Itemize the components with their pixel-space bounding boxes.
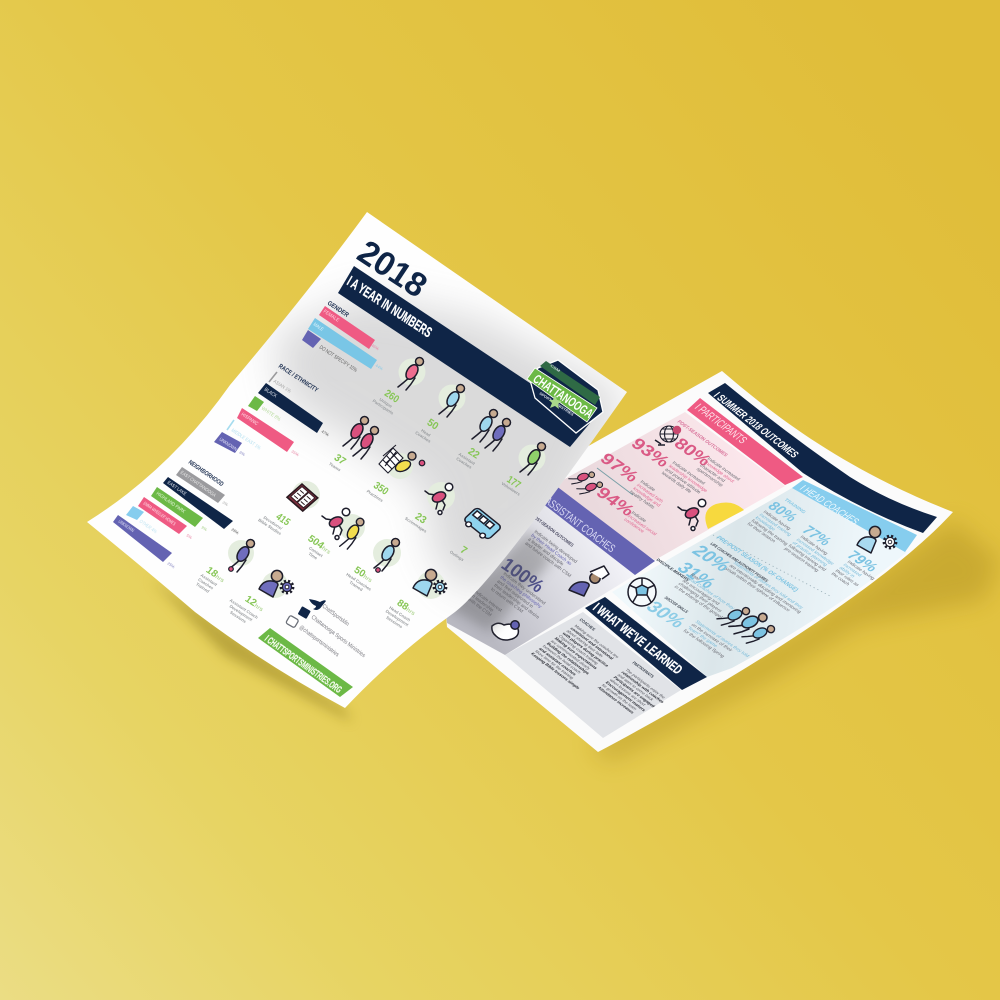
text: participants learned list: The participants enjoy the xyxy=(624,668,667,700)
chart: race bars: 8% xyxy=(238,450,247,457)
logo: chattanooga sports ministries xyxy=(527,360,603,433)
stat: 22 assistant coaches: Coaches xyxy=(455,456,473,470)
stat: 100%: 100% xyxy=(497,554,548,597)
stat: 88 hrs head coach development xyxy=(382,569,446,632)
text: 79% training note: Indicate having xyxy=(846,560,876,581)
stat: 50 head coaches: Coaches xyxy=(414,430,432,444)
shadow of left sheet on right sheet xyxy=(445,530,552,632)
text: coaches learned list: between the head coach xyxy=(542,644,583,675)
text: 31% note: Head Coaches of how they xyxy=(685,576,736,610)
text: 79% training note: ability in xyxy=(838,566,856,578)
icon: graduate xyxy=(569,566,609,596)
chart: neighborhood bars: 3% xyxy=(221,500,230,507)
text: coaches learned list: Making sure expectations xyxy=(553,637,599,670)
chart: race bars: MIDDLE EAST 1% xyxy=(230,428,262,452)
chart: race bars: 47% xyxy=(320,429,330,437)
chart: gender bars xyxy=(302,306,384,374)
text: 100% note: the coaching philosophy xyxy=(499,575,543,609)
band: what we've learned xyxy=(585,597,707,690)
text: 77% training note: increased knowledge xyxy=(795,538,836,566)
text: 80% training note: following the training xyxy=(750,519,790,546)
heading: pre-post season: PRE-POST SEASON (% OF CHANGE) xyxy=(714,535,800,593)
stat: 80% participants: 80% xyxy=(670,435,715,469)
icon: group of coaches xyxy=(715,597,776,652)
text: 79% training note: the coach xyxy=(830,572,851,586)
stat: 415 devotions: 415 xyxy=(273,511,293,528)
text: participants learned list: Attendance increases xyxy=(597,686,636,715)
stat: 260 unique participants xyxy=(372,358,426,416)
text: 77% training note: of practice planning xyxy=(791,541,829,567)
chart: neighborhood bars: EAST CHATTANOOGA xyxy=(179,470,217,499)
stat: 50 head coaches: 50 xyxy=(425,417,440,433)
chart: neighborhood bars: 9% xyxy=(200,525,209,532)
stat: 50 head coaches: Head xyxy=(420,428,432,438)
band: summer 2018 outcomes: I SUMMER 2018 OUTCOMES xyxy=(711,391,801,460)
text: 97% note: knowledge and xyxy=(632,486,662,508)
logo: chattanooga sports ministries: CSM xyxy=(549,364,561,373)
stat: 350 practices: 350 xyxy=(371,480,391,498)
stat: 177 volunteers xyxy=(500,442,546,497)
text: 77% training note: pre-season training xyxy=(783,547,820,573)
stat: 50 hrs head coaches trained: Head Coaches xyxy=(345,572,373,592)
text: coaches learned list: Making sure the coaches are xyxy=(573,624,621,659)
chart: race bars: WHITE 8% xyxy=(260,406,282,423)
chart: race bars: BLACK xyxy=(263,387,278,400)
text: 93% note: towards daily life xyxy=(660,471,693,494)
stat: 93%: 93% xyxy=(627,435,674,471)
band: a year in numbers xyxy=(338,266,590,447)
stat: 37 teams: Teams xyxy=(328,461,342,473)
text: coaches learned list: with players during practice xyxy=(561,631,611,668)
stat: 79%: 79% xyxy=(843,548,882,575)
text: participants learned list: for growth on the team xyxy=(600,683,639,711)
stat: 88 hrs head coach development: Sessions xyxy=(385,615,404,630)
stat: 7 outings: 7 xyxy=(458,545,469,557)
chart: gender bars: MALE xyxy=(312,322,325,333)
icon: piggy bank xyxy=(492,621,519,640)
chart: neighborhood bars: UNKNOWN xyxy=(117,519,136,534)
text: assistant small note: Indicate interest xyxy=(473,589,504,613)
logo: chattanooga sports ministries: SPORTS MINISTRIES xyxy=(538,392,575,417)
band: summer 2018 outcomes xyxy=(708,383,937,533)
stat: 415 devotions xyxy=(257,481,320,536)
text: 80% training note: knowledge xyxy=(754,516,777,532)
stat: 92%: 92% xyxy=(490,510,528,543)
icon: head coach with gear xyxy=(857,526,896,553)
text: 92% note: Indicate being developed xyxy=(533,529,579,564)
text: 30% note: Statements of stories they told xyxy=(694,620,751,658)
chart: race bars xyxy=(214,372,330,457)
stat: 94%: 94% xyxy=(592,484,639,520)
panel: left sheet xyxy=(87,212,627,708)
text: 93% note: and positive attitude xyxy=(664,467,702,495)
panel: right sheet xyxy=(440,371,953,752)
text: 100% note: to return with CSM xyxy=(490,586,524,614)
chart: race bars: UNKNOWN xyxy=(218,437,238,453)
chart: neighborhood bars: 26% xyxy=(230,527,240,536)
subheading: disciple-makers: DISCIPLE-MAKERS xyxy=(655,558,691,582)
text: 79% training note: their roles as xyxy=(834,569,861,587)
text: participants learned list: and want to come back xyxy=(616,673,656,702)
text: participants learned list: Encouragement matters xyxy=(604,681,648,712)
stat: 18 hrs assistant coaches trained: Assistant xyxy=(199,573,219,587)
stat: 50 hrs head coaches trained xyxy=(343,538,401,596)
text: 97% note: healthy habits xyxy=(628,490,656,510)
divider: dotted xyxy=(713,535,832,597)
logo: chattanooga sports ministries: CHATTANOOGA xyxy=(530,371,597,421)
stat: 77%: 77% xyxy=(798,523,835,549)
stat: 260 unique participants: Participants xyxy=(372,398,395,416)
text: participants learned list: Participants are engaged xyxy=(612,675,657,708)
heading: assistant post-season outcomes: POST-SEASON OUTCOMES xyxy=(531,514,574,549)
chart: race bars: ASIAN 1% xyxy=(272,379,292,395)
stat: 37 teams xyxy=(328,416,378,473)
text: 94% note: increased social xyxy=(627,514,658,536)
chart: neighborhood bars: EMMA WHEELER HOMES xyxy=(142,501,177,527)
text: assistant small note: in leadership xyxy=(470,593,495,613)
stat: 80% head coaches: 80% xyxy=(764,499,801,525)
stat: 88 hrs head coach development: Head Coach xyxy=(388,605,412,623)
stat: 22 assistant coaches xyxy=(455,410,510,470)
text: participants learned list: relationship with coaches xyxy=(620,670,666,704)
text: 80% note: sportsmanship xyxy=(695,467,724,488)
text: coaches learned list: are communicated clearly xyxy=(549,639,593,671)
shadow: left sheet xyxy=(150,578,352,722)
text: coaches learned list: about sharing their faith xyxy=(565,629,605,658)
stat: 350 practices: Practices xyxy=(366,489,385,503)
heading: post-season outcomes: POST-SEASON OUTCOMES xyxy=(675,420,729,458)
stat: 12 hrs assistant coach development: Development xyxy=(228,604,254,622)
stat: 30%: 30% xyxy=(641,598,690,632)
text: 77% training note: following training and xyxy=(787,544,828,572)
panel: assistant coaches background xyxy=(440,503,635,655)
band: a year in numbers: I A YEAR IN NUMBERS xyxy=(344,274,434,341)
stat: 350 practices xyxy=(366,445,425,503)
stat: 50 hrs head coaches trained: Trained xyxy=(348,580,364,592)
stat: 88 hrs head coach development: 88hrs xyxy=(395,598,419,618)
panel: head coaches background xyxy=(612,488,907,677)
chart: neighborhood bars xyxy=(113,467,240,570)
chart: neighborhood bars: 25% xyxy=(166,561,176,570)
stat: 177 volunteers: 177 xyxy=(504,475,522,491)
text: coaches learned list: Building the relationships xyxy=(546,642,591,676)
chart: gender bars: 44% xyxy=(374,363,384,371)
stat: 260 unique participants: Unique xyxy=(378,397,394,409)
text: 77% training note: Indicate having xyxy=(799,535,829,556)
text: coaches learned list: Organizing coach training xyxy=(557,634,600,666)
social links: ChattSportsMin xyxy=(321,604,350,628)
shadow: right sheet xyxy=(590,520,1000,762)
chart: gender bars: 46% xyxy=(370,343,380,351)
text: 94% note: confidence xyxy=(623,517,646,534)
text: 80% note: knowledge about xyxy=(703,460,736,484)
text: 92% note: by their Head Coach as xyxy=(530,533,573,567)
stat: 23 scrimmages xyxy=(404,482,455,534)
stat: 504 hrs contact time: Contact xyxy=(308,546,324,558)
text: assistant small note: with the CSM xyxy=(467,597,493,617)
banner: website: I CHATTSPORTSMINISTRIES.ORG xyxy=(262,634,344,696)
chart: gender bars: FEMALE xyxy=(322,309,341,324)
icon: participant soccer xyxy=(678,499,706,530)
stat: 415 devotions: Devotions/ xyxy=(262,515,284,531)
stat: 12 hrs assistant coach development: 12hrs xyxy=(243,594,267,614)
chart: gender bars: DO NOT SPECIFY 10% xyxy=(318,345,358,374)
stat: 504 hrs contact time: Time xyxy=(307,551,319,561)
participants yellow semicircle xyxy=(705,502,744,529)
text: 20% note: youth within their sphere of influence xyxy=(724,567,792,612)
chart: neighborhood bars: EAST LAKE xyxy=(166,480,188,497)
stat: 12 hrs assistant coach development: Assistant Coach xyxy=(229,598,259,620)
band: participants: I PARTICIPANTS xyxy=(692,402,749,446)
stat: 23 scrimmages: 23 xyxy=(413,511,428,527)
icon: soccer ball xyxy=(628,578,656,606)
stat: 415 devotions: Bible Studies xyxy=(257,517,283,536)
band: what we've learned: I WHAT WE'VE LEARNED xyxy=(590,600,686,677)
stat: 50 hrs head coaches trained: 50hrs xyxy=(352,565,376,585)
text: 31% note: are encouraging and xyxy=(681,579,721,606)
stat: 22 assistant coaches: Assistant xyxy=(458,451,477,466)
icon: two participants xyxy=(567,463,604,502)
text: 31% note: Rate xyxy=(689,573,702,581)
subheading: soccer skills: SOCCER SKILLS xyxy=(663,596,690,614)
panel: what we've learned background xyxy=(505,612,681,738)
band: assistant coaches: I ASSISTANT COACHES xyxy=(539,493,617,555)
text: participants learned list: when lessons are short xyxy=(608,678,648,707)
social links xyxy=(286,599,366,659)
stat: 37 teams: 37 xyxy=(332,452,348,467)
text: coaches learned list: and assistant coaches xyxy=(538,647,578,677)
stat: 18 hrs assistant coaches trained xyxy=(193,540,254,595)
stat: 97%: 97% xyxy=(596,450,643,486)
stat: 12 hrs assistant coach development: Sessions xyxy=(229,610,248,624)
text: 80% note: character and xyxy=(699,463,727,483)
stat: 18 hrs assistant coaches trained: 18hrs xyxy=(204,565,228,585)
text: 80% training note: for their season xyxy=(746,522,777,543)
chart: neighborhood bars: OTHER 4% xyxy=(138,519,158,535)
stat: 31%: 31% xyxy=(672,559,720,592)
text: 97% note: increased faith xyxy=(636,483,665,504)
stat: 12 hrs assistant coach development xyxy=(223,570,293,628)
icon: globe target xyxy=(655,426,681,445)
text: 100% note: their leadership and desire xyxy=(493,583,541,620)
chart: race bars: HISPANIC xyxy=(240,412,259,427)
stat: 20%: 20% xyxy=(687,542,735,575)
text: 92% note: and future coach with CSM xyxy=(524,541,572,578)
heading: participants learned: PARTICIPANTS xyxy=(631,661,655,679)
stat: 177 volunteers: Volunteers xyxy=(500,481,522,497)
text: 30% note: "learn" the game xyxy=(686,626,719,648)
text: 80% training note: increased training xyxy=(758,513,793,537)
text: 100% note: Indicate they understand xyxy=(502,571,547,606)
stat: 50 head coaches xyxy=(414,384,466,444)
stat: 23 scrimmages: Scrimmages xyxy=(404,516,428,534)
text: 79% training note: increased xyxy=(842,563,863,577)
stat: 7 outings xyxy=(449,507,502,563)
text: 20% note: Statements of stories they told and they xyxy=(732,561,805,610)
stat: 88 hrs head coach development: Development xyxy=(385,609,410,628)
stat: 504 hrs contact time: 504hrs xyxy=(305,533,334,557)
text: 100% note: and feel supported in xyxy=(496,579,535,609)
divider: participants teal xyxy=(597,468,633,495)
text: 93% note: Indicate increased xyxy=(671,460,706,486)
heading: race / ethnicity: RACE / ETHNICITY xyxy=(277,363,320,394)
text: 92% note: a leader and disciple xyxy=(527,537,565,567)
social links: @chattsportsministries xyxy=(298,625,340,658)
band: head coaches xyxy=(792,480,917,552)
stat: 260 unique participants: 260 xyxy=(382,388,401,406)
text: 30% note: on the increase of their xyxy=(690,623,734,653)
text: 30% note: for the following Spring xyxy=(682,629,726,659)
chart: neighborhood bars: HIGHLAND PARK xyxy=(155,491,187,515)
text: 80% note: Indicate increased xyxy=(706,456,741,482)
text: 31% note: in the sharing of the gospel xyxy=(673,585,724,619)
heading: gender: GENDER xyxy=(326,300,350,319)
stat: 18 hrs assistant coaches trained: Coaches xyxy=(197,577,215,591)
heading: coaches: COACHES xyxy=(578,618,597,631)
stat: 7 outings: Outings xyxy=(449,549,465,563)
chart: neighborhood bars: 5% xyxy=(185,533,194,540)
chart: race bars: 35% xyxy=(290,449,300,457)
text: 31% note: challenging their players xyxy=(677,582,724,613)
text: 97% note: Indicate xyxy=(639,479,657,492)
subheading: life coaches: LIFE COACHES AND AUTHORITY FIGURES xyxy=(709,542,770,583)
band: participants xyxy=(687,398,803,485)
text: 20% note: are intentionally discipling and mentoring xyxy=(728,564,803,614)
text: coaches learned list: consistent and intentional xyxy=(569,626,615,660)
title: 2018: 2018 xyxy=(351,233,434,305)
stat: 504 hrs contact time xyxy=(305,508,365,562)
text: 93% note: leadership knowledge xyxy=(668,464,709,493)
social links: Chattanooga Sports Ministries xyxy=(310,615,366,659)
stat: 22 assistant coaches: 22 xyxy=(466,446,481,462)
sheet curl shading xyxy=(275,295,625,595)
text: 94% note: Indicate xyxy=(630,510,648,523)
band: head coaches: I HEAD COACHES xyxy=(797,484,861,526)
banner: website xyxy=(258,628,353,697)
text: coaches learned list: Keeping Bible lessons simple xyxy=(530,652,582,690)
heading: training: TRAINING xyxy=(782,498,807,515)
heading: neighborhood: NEIGHBORHOOD xyxy=(187,459,225,488)
text: coaches learned list: More time for the training xyxy=(534,649,576,680)
panel: participants background xyxy=(545,412,785,560)
text: 80% training note: Indicate having xyxy=(762,510,792,531)
stat: 18 hrs assistant coaches trained: Trained xyxy=(195,582,211,594)
